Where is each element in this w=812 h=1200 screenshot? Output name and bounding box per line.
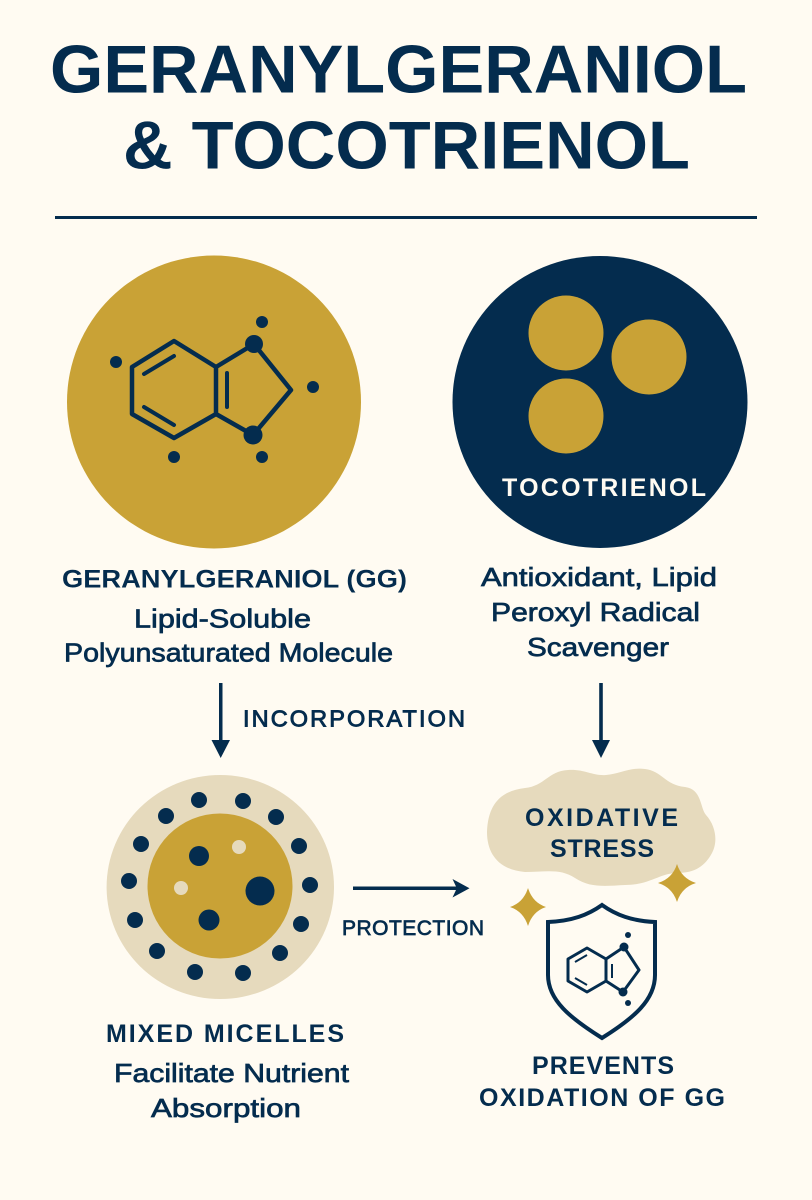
text: tocotrienol description: Scavenger xyxy=(527,632,669,662)
title: GERANYLGERANIOL xyxy=(50,32,747,108)
text: prevents oxidation: PREVENTS xyxy=(532,1052,674,1080)
text: mixed micelles xyxy=(106,1020,350,1123)
arrow: micelles to oxidative stress xyxy=(353,879,470,898)
text: geranylgeraniol description: Polyunsaturated Molecule xyxy=(64,638,393,668)
icon: oxidative stress cloud: OXIDATIVE xyxy=(525,804,678,832)
text: mixed micelles: Facilitate Nutrient xyxy=(114,1058,350,1088)
title xyxy=(50,32,747,184)
label: protection: PROTECTION xyxy=(342,917,484,940)
icon: mixed micelle xyxy=(107,775,334,999)
icon: oxidative stress cloud: STRESS xyxy=(550,835,654,863)
text: prevents oxidation xyxy=(479,1052,725,1112)
text: geranylgeraniol description xyxy=(62,566,407,668)
text: mixed micelles: Absorption xyxy=(151,1093,301,1123)
text: mixed micelles: MIXED MICELLES xyxy=(106,1020,344,1048)
arrow: geranylgeraniol to micelles xyxy=(212,683,230,758)
text: tocotrienol description xyxy=(481,562,717,662)
arrow: tocotrienol to oxidative stress xyxy=(592,683,610,758)
text: tocotrienol description: Antioxidant, Lipid xyxy=(481,562,717,592)
icon: sparkle left xyxy=(510,888,546,926)
icon: GG molecule xyxy=(110,316,319,463)
label: incorporation: INCORPORATION xyxy=(243,706,465,732)
icon: shield with molecule xyxy=(548,905,655,1038)
text: prevents oxidation: OXIDATION OF GG xyxy=(479,1084,725,1112)
title: & TOCOTRIENOL xyxy=(123,108,690,184)
text: geranylgeraniol description: GERANYLGERANIOL (GG) xyxy=(62,566,407,594)
icon: oxidative stress cloud xyxy=(487,769,715,886)
text: geranylgeraniol description: Lipid-Soluble xyxy=(134,604,311,634)
icon: sparkle right xyxy=(658,864,696,902)
panel: tocotrienol circle: TOCOTRIENOL xyxy=(502,474,706,502)
text: tocotrienol description: Peroxyl Radical xyxy=(491,597,700,627)
panel: geranylgeraniol circle xyxy=(67,256,361,548)
panel: tocotrienol circle xyxy=(452,256,748,548)
